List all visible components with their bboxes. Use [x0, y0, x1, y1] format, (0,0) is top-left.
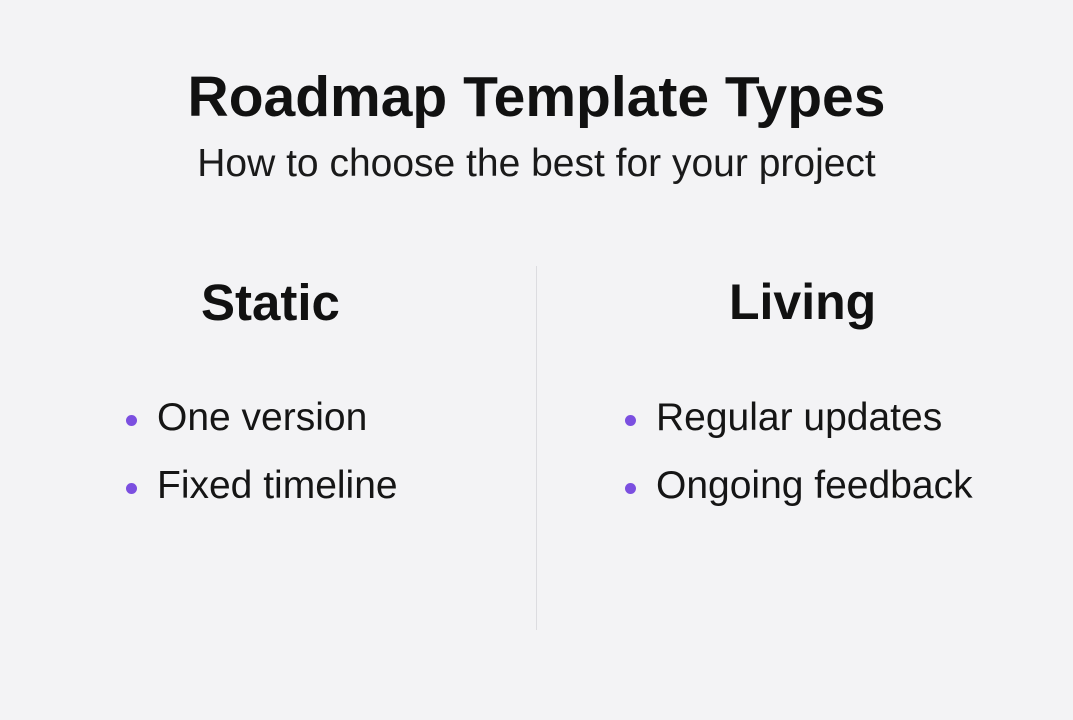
heading: living: Living [729, 274, 876, 330]
list: living items: Ongoing feedback [656, 464, 973, 507]
list: static items: One version [157, 396, 367, 439]
divider [536, 266, 537, 630]
title: Roadmap Template Types [188, 65, 885, 129]
list: living items [625, 396, 973, 507]
subtitle: How to choose the best for your project [197, 142, 876, 185]
list: living items: Regular updates [656, 396, 942, 439]
panel: static [126, 274, 398, 507]
panel: living [625, 274, 973, 507]
heading: static: Static [201, 274, 340, 331]
list: static items: Fixed timeline [157, 464, 398, 507]
list: static items [126, 396, 398, 507]
